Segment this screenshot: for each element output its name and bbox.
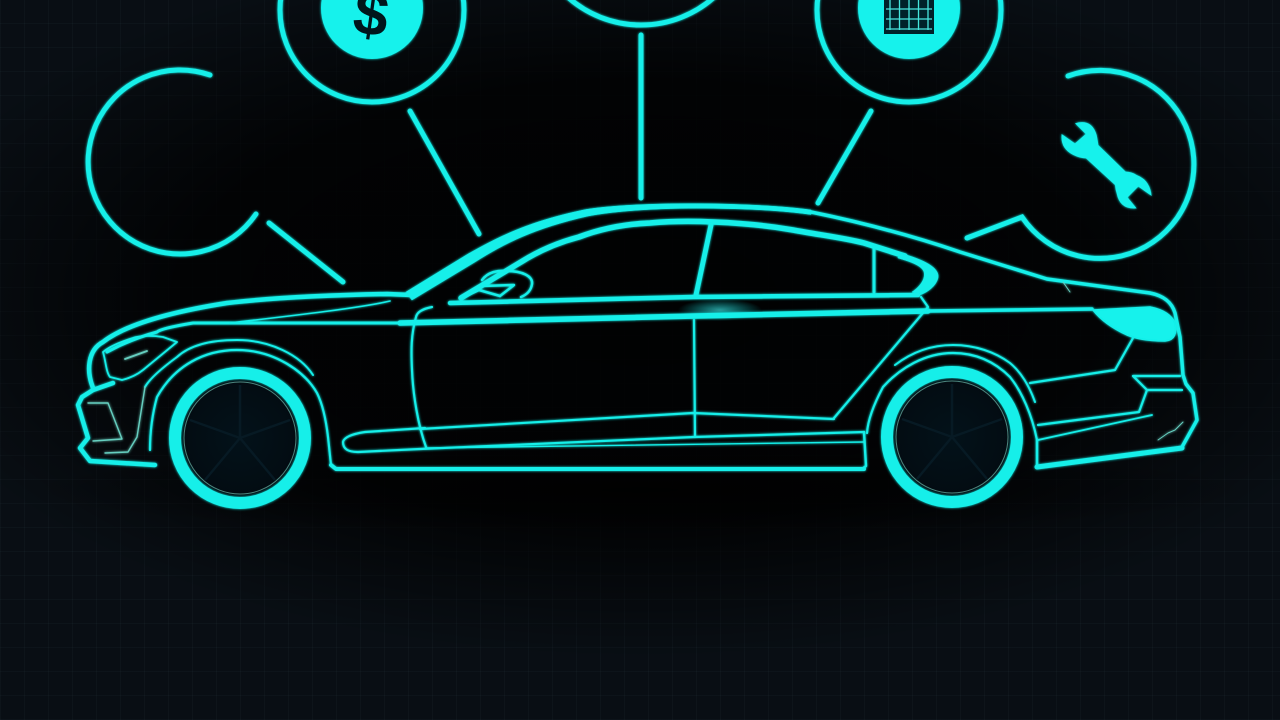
icon circles and connectors: [88, 0, 1194, 282]
wheel spokes: [902, 384, 1002, 479]
hood line: [89, 294, 412, 388]
ground shadow: [20, 445, 1260, 535]
windscreen flare: [678, 299, 762, 321]
taillight: [1093, 307, 1176, 341]
rim ring: [896, 381, 1008, 493]
windshield and roof band: [406, 204, 811, 300]
front wheel: [175, 373, 305, 503]
front fender line: [145, 340, 313, 387]
window outline: [461, 221, 905, 298]
rear lower edge: [1037, 448, 1182, 467]
circle: wrench: [967, 70, 1194, 258]
circle: dollar: [280, 0, 464, 102]
rear fender line: [895, 345, 1035, 402]
hood crease: [230, 301, 390, 323]
rear door edge: [694, 320, 695, 437]
rear wheel: [887, 372, 1017, 502]
circle: calendar: [817, 0, 1001, 102]
rear deck and tail: [811, 212, 1197, 447]
trunk crease: [1030, 338, 1133, 383]
B pillar: [696, 225, 711, 295]
front wheel arch: [150, 350, 331, 465]
rear window hook: [898, 253, 938, 295]
connector: left: [269, 223, 343, 282]
front bumper: [78, 383, 155, 465]
front intake: [88, 403, 122, 441]
mirror: [462, 271, 532, 298]
headlight: [103, 336, 177, 380]
circle: top centre: [531, 0, 751, 25]
tyre ring: [175, 373, 305, 503]
scratches: [1063, 282, 1183, 440]
connector: centre: [638, 35, 644, 198]
C pillar: [872, 247, 876, 292]
icon: calendar grid: [884, 0, 934, 34]
icon: wrench: [1061, 122, 1152, 208]
front door edge: [411, 307, 432, 447]
wheel spokes: [190, 385, 290, 480]
connector: dollar: [410, 111, 479, 234]
side skirt: [343, 428, 864, 452]
circle: empty left: [88, 70, 256, 254]
connector: calendar: [818, 111, 871, 203]
tyre ring: [887, 372, 1017, 502]
rear bumper lines: [1038, 376, 1182, 425]
rear wheel arch: [867, 353, 1037, 440]
character line: [400, 311, 928, 323]
belt line: [450, 295, 918, 303]
car outline: [78, 204, 1197, 469]
rim ring: [184, 382, 296, 494]
sill crease: [420, 413, 834, 429]
bottom sill: [331, 465, 864, 469]
